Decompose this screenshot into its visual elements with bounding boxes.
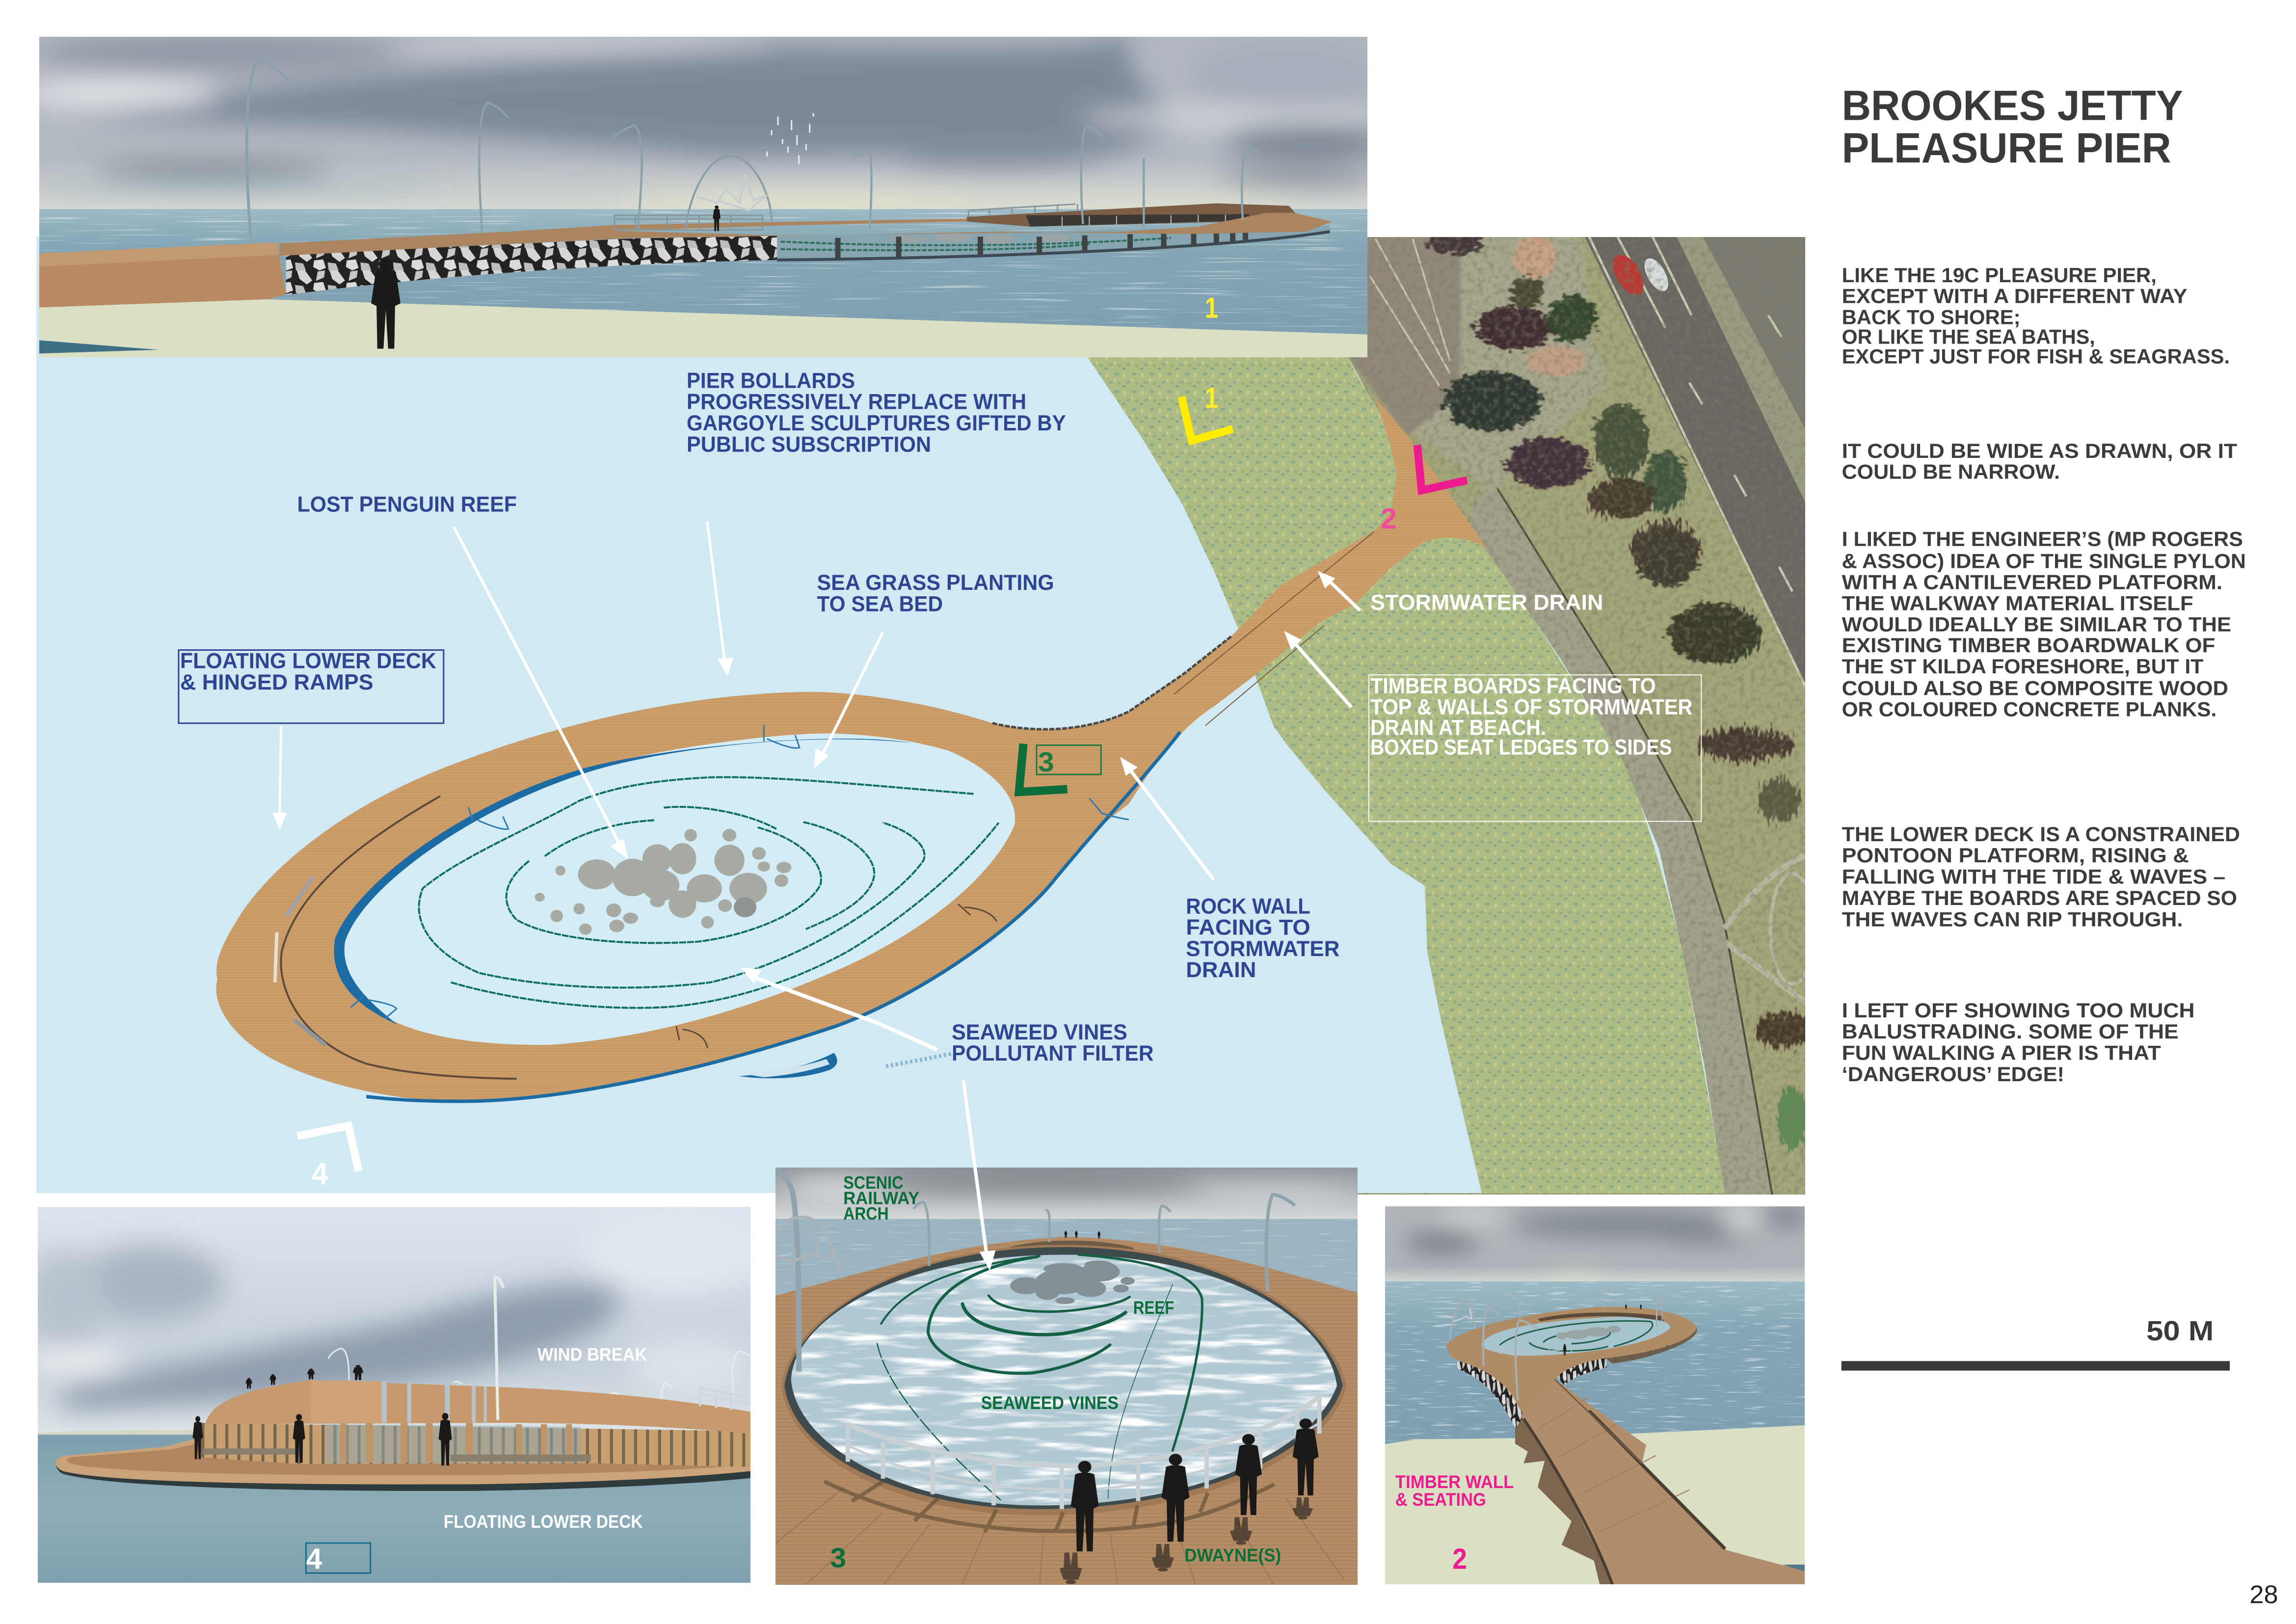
railing [614, 204, 1077, 230]
arrow: timber boards [1284, 631, 1351, 707]
plan label: seaweed vines: POLLUTANT FILTER [952, 1041, 1154, 1065]
plan label: timber boards box: BOXED SEAT LEDGES TO SIDES [1370, 735, 1672, 760]
section marker 3 [1019, 744, 1101, 792]
plan label: floating lower deck box [179, 649, 444, 723]
text block: wide or narrow [1842, 439, 2238, 483]
title: BROOKES JETTY [1842, 82, 2183, 130]
view 3 labels: 3 [830, 1543, 846, 1573]
promenade path [1472, 487, 1773, 1198]
text block: engineer's idea: EXISTING TIMBER BOARDWALK OF [1842, 634, 2215, 657]
section marker 2: 2 [1381, 502, 1397, 535]
view 3 labels: SEAWEED VINES [981, 1392, 1119, 1413]
view 3 labels: DWAYNE(S) [1184, 1544, 1281, 1565]
seaweed vines [877, 1255, 1202, 1500]
timber stepped wall [1515, 1416, 1614, 1584]
hinged ramps [351, 725, 800, 1018]
plan label: seaweed vines: SEAWEED VINES [952, 1020, 1127, 1044]
scenic arch [775, 1217, 840, 1272]
seaweed vines [419, 777, 999, 1008]
section marker 1 [1181, 381, 1233, 441]
panel: plan drawing of racket shaped pier [216, 398, 1487, 1101]
view 2 labels [1395, 1471, 1514, 1575]
pool wall [781, 1245, 1347, 1516]
view 3 labels: SCENIC [843, 1173, 904, 1193]
text block: engineer's idea: OR COLOURED CONCRETE PLANKS. [1842, 698, 2216, 721]
deck [775, 1237, 1359, 1586]
text block: engineer's idea: & ASSOC) IDEA OF THE SINGLE PYLON [1842, 549, 2246, 572]
view 4 labels [306, 1344, 647, 1575]
dwaynes [1071, 1461, 1099, 1551]
text block: engineer's idea: WITH A CANTILEVERED PLATFORM. [1842, 571, 2222, 594]
plan label: pier bollards: PROGRESSIVELY REPLACE WITH [687, 390, 1026, 414]
boat [739, 1053, 837, 1078]
balustrade shadow [825, 1482, 1274, 1532]
panel: plan water [36, 237, 1725, 1193]
text block: lower deck: MAYBE THE BOARDS ARE SPACED SO [1842, 886, 2237, 909]
arch and lamps [1450, 1290, 1667, 1400]
view 2 labels: & SEATING [1395, 1489, 1486, 1510]
view 2 labels: 2 [1452, 1542, 1467, 1575]
rocks [1556, 1326, 1621, 1339]
plan label: stormwater drain: STORMWATER DRAIN [1370, 590, 1603, 614]
arrow: stormwater drain [1318, 571, 1360, 611]
deck surface [280, 213, 1332, 256]
ring edge [1605, 1327, 1697, 1363]
text block: like the 19C pleasure pier: LIKE THE 19C PLEASURE PIER, [1842, 264, 2157, 287]
section marker 4: 4 [312, 1157, 328, 1191]
text block: lower deck: THE LOWER DECK IS A CONSTRAINED [1842, 823, 2240, 846]
plan label: sea grass planting [817, 570, 1054, 616]
piles and reef behind [777, 225, 1330, 260]
panel: view 2 approach from the beach [1383, 1204, 1808, 1586]
dwaynes [192, 1416, 203, 1459]
railing near [1498, 1348, 1583, 1356]
lamps [775, 1169, 1295, 1372]
text block: engineer's idea: COULD ALSO BE COMPOSITE WOOD [1842, 677, 2228, 700]
dwayne shadows [1060, 1497, 1313, 1584]
road and median [1472, 236, 1814, 1198]
lower floating deck [56, 1438, 751, 1491]
water [791, 1255, 1337, 1505]
scale bar [1842, 1316, 2230, 1371]
view 4 labels: FLOATING LOWER DECK [444, 1511, 643, 1532]
sky [36, 35, 1371, 211]
text block: engineer's idea: WOULD IDEALLY BE SIMILAR TO THE [1842, 612, 2231, 636]
plan label: pier bollards: PUBLIC SUBSCRIPTION [687, 432, 931, 456]
balustrade [846, 1397, 1320, 1509]
view number 1: 1 [1205, 291, 1218, 324]
text block: lower deck: FALLING WITH THE TIDE & WAVES – [1842, 865, 2225, 888]
tall white lamp [495, 1277, 504, 1420]
arrow: floating lower deck [272, 726, 287, 830]
walkway [1521, 1379, 1805, 1586]
reef rocks [1010, 1261, 1135, 1304]
title [1842, 82, 2183, 172]
text block: wide or narrow: COULD BE NARROW. [1842, 460, 2060, 483]
arrow: lost penguin reef [454, 527, 628, 859]
clouds [25, 1212, 766, 1411]
plan label: seaweed vines [952, 1020, 1154, 1065]
sea [1383, 1281, 1808, 1450]
plan label: lost penguin reef: LOST PENGUIN REEF [297, 492, 517, 517]
lower deck edge and ramps [281, 796, 517, 1079]
plan label: sea grass planting: TO SEA BED [817, 591, 943, 616]
rock wall walls [1457, 1361, 1523, 1436]
view 4 labels: 4 [306, 1542, 322, 1575]
text block: like the 19C pleasure pier: EXCEPT WITH A DIFFERENT WAY [1842, 284, 2188, 307]
panel: view 1 pier from beach [18, 35, 1389, 358]
section marker 3: 3 [1038, 747, 1054, 778]
text block: like the 19C pleasure pier: OR LIKE THE SEA BATHS, [1842, 325, 2095, 348]
arrow: pier bollards [707, 521, 733, 676]
sea [36, 209, 1371, 339]
arrow: rock wall [1120, 757, 1214, 880]
title: PLEASURE PIER [1842, 125, 2171, 172]
rock wall facing [286, 236, 777, 295]
text block: engineer's idea: THE WALKWAY MATERIAL ITSELF [1842, 591, 2193, 614]
plan label: timber boards box: TIMBER BOARDS FACING TO [1370, 673, 1656, 698]
trees [1586, 410, 1812, 1149]
plan label: pier bollards [687, 368, 1066, 456]
scale bar: 50 M [2146, 1316, 2214, 1347]
text block: balustrading: ‘DANGEROUS’ EDGE! [1842, 1063, 2064, 1086]
plan label: sea grass planting: SEA GRASS PLANTING [817, 570, 1054, 595]
people [1563, 1344, 1566, 1356]
inner water [337, 733, 1015, 1045]
view 2 labels: TIMBER WALL [1395, 1471, 1514, 1492]
inner water [1481, 1316, 1670, 1356]
text block: like the 19C pleasure pier: BACK TO SHORE; [1842, 305, 2021, 328]
panel: view 3 looking over the pool [775, 1168, 1359, 1586]
text block: lower deck: PONTOON PLATFORM, RISING & [1842, 844, 2189, 867]
sand [1383, 1425, 1805, 1586]
view 3 labels: RAILWAY [843, 1189, 919, 1208]
abutment [39, 242, 286, 308]
plan label: timber boards box: DRAIN AT BEACH. [1370, 715, 1546, 740]
panel: plan beach land [1088, 357, 1725, 1193]
rail [699, 1388, 751, 1410]
walkway edges [1523, 1419, 1612, 1584]
plan label: pier bollards: PIER BOLLARDS [687, 368, 855, 393]
plan label: rock wall [1186, 894, 1339, 982]
text block: balustrading [1842, 999, 2195, 1086]
far timber wall [1008, 1241, 1133, 1253]
blue crescent [334, 739, 911, 1025]
text block: like the 19C pleasure pier: EXCEPT JUST FOR FISH & SEAGRASS. [1842, 345, 2230, 368]
sky [775, 1168, 1359, 1221]
figures [713, 206, 721, 231]
view 3 labels: ARCH [843, 1204, 889, 1224]
clouds [18, 35, 1389, 208]
section marker 1: 1 [1205, 381, 1218, 414]
water [35, 1435, 756, 1585]
text block: like the 19C pleasure pier [1842, 264, 2230, 368]
wind break far side [967, 203, 1300, 227]
panel: view 4 floating lower deck [25, 1205, 766, 1585]
section marker 4 [297, 1126, 359, 1191]
plan label: rock wall: FACING TO [1186, 915, 1310, 940]
scenic railway arch [685, 156, 772, 230]
page number: 28 [2249, 1580, 2278, 1609]
seaweed [1499, 1321, 1653, 1351]
lamp posts [247, 59, 1263, 243]
slatted wall under wind break [200, 1423, 751, 1467]
blue outer edge of deck [366, 732, 1180, 1101]
cars [1613, 254, 1643, 295]
view 4 labels: WIND BREAK [537, 1344, 647, 1365]
lost penguin reef rocks [535, 829, 791, 935]
plan label: rock wall: DRAIN [1186, 958, 1256, 982]
text block: engineer's idea: I LIKED THE ENGINEER’S (MP ROGERS [1842, 528, 2243, 551]
pier ring deck [1446, 1307, 1697, 1416]
text block: balustrading: FUN WALKING A PIER IS THAT [1842, 1041, 2161, 1065]
plan label: floating lower deck box: FLOATING LOWER DECK [180, 649, 436, 673]
panel: aerial photo of foreshore [1325, 229, 1814, 1198]
sky [35, 1205, 756, 1435]
lamps behind [328, 1349, 750, 1399]
plan label: timber boards box: TOP & WALLS OF STORMWATER [1370, 695, 1692, 719]
text block: lower deck: THE WAVES CAN RIP THROUGH. [1842, 907, 2183, 931]
arrow: seaweed vines [741, 968, 937, 1050]
plan label: rock wall: ROCK WALL [1186, 894, 1310, 918]
arrow: to view 3 [963, 1080, 995, 1271]
text block: engineer's idea: THE ST KILDA FORESHORE, BUT IT [1842, 655, 2204, 678]
section marker 2 [1381, 445, 1467, 535]
view 3 labels [830, 1173, 1281, 1573]
plan label: pier bollards: GARGOYLE SCULPTURES GIFTED BY [687, 411, 1066, 435]
text block: wide or narrow: IT COULD BE WIDE AS DRAWN, OR IT [1842, 439, 2238, 462]
view 3 labels: REEF [1133, 1297, 1174, 1318]
pier deck [216, 398, 1487, 1101]
text block: engineer's idea [1842, 528, 2246, 721]
wind break wall [205, 1380, 751, 1434]
plan label: timber boards box [1369, 673, 1701, 821]
text block: balustrading: BALUSTRADING. SOME OF THE [1842, 1020, 2179, 1043]
text block: lower deck [1842, 823, 2240, 931]
gulls [767, 113, 813, 164]
arrow: sea grass [814, 633, 883, 769]
sky [1383, 1204, 1808, 1282]
sea [775, 1219, 1359, 1298]
plan label: rock wall: STORMWATER [1186, 936, 1339, 961]
text block: balustrading: I LEFT OFF SHOWING TOO MUCH [1842, 999, 2195, 1022]
plan label: floating lower deck box: & HINGED RAMPS [180, 670, 374, 694]
sand [36, 299, 1371, 358]
